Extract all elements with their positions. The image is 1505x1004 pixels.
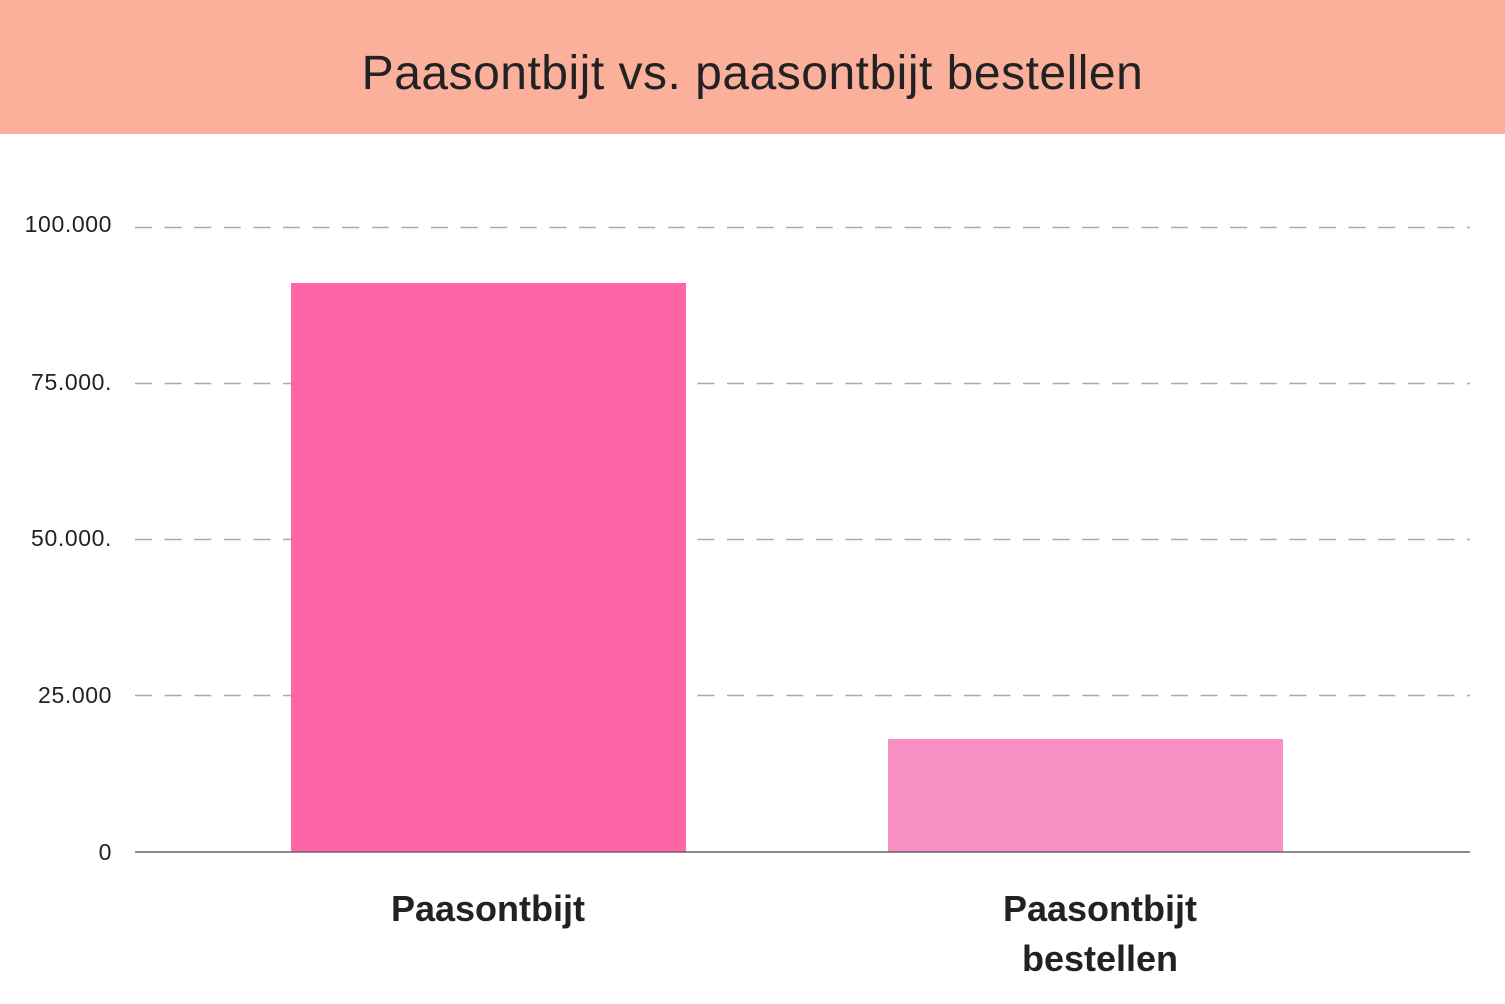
title: Paasontbijt vs. paasontbijt bestellen: [362, 47, 1143, 100]
y-axis labels: 50.000.: [31, 525, 112, 551]
y-axis labels: 0: [99, 839, 112, 865]
bar: Paasontbijt: [291, 283, 686, 852]
header banner: [0, 0, 1505, 134]
x-axis labels: Paasontbijt: [391, 888, 585, 929]
y-axis labels: 100.000: [25, 211, 112, 237]
bar: Paasontbijt bestellen: [888, 739, 1283, 852]
y-axis labels: 75.000.: [31, 369, 112, 395]
y-axis labels: [25, 211, 112, 865]
x-axis labels: [391, 888, 1197, 979]
x-axis labels: Paasontbijt: [1003, 888, 1197, 929]
x-axis labels: bestellen: [1022, 938, 1178, 979]
y-axis labels: 25.000: [38, 682, 112, 708]
